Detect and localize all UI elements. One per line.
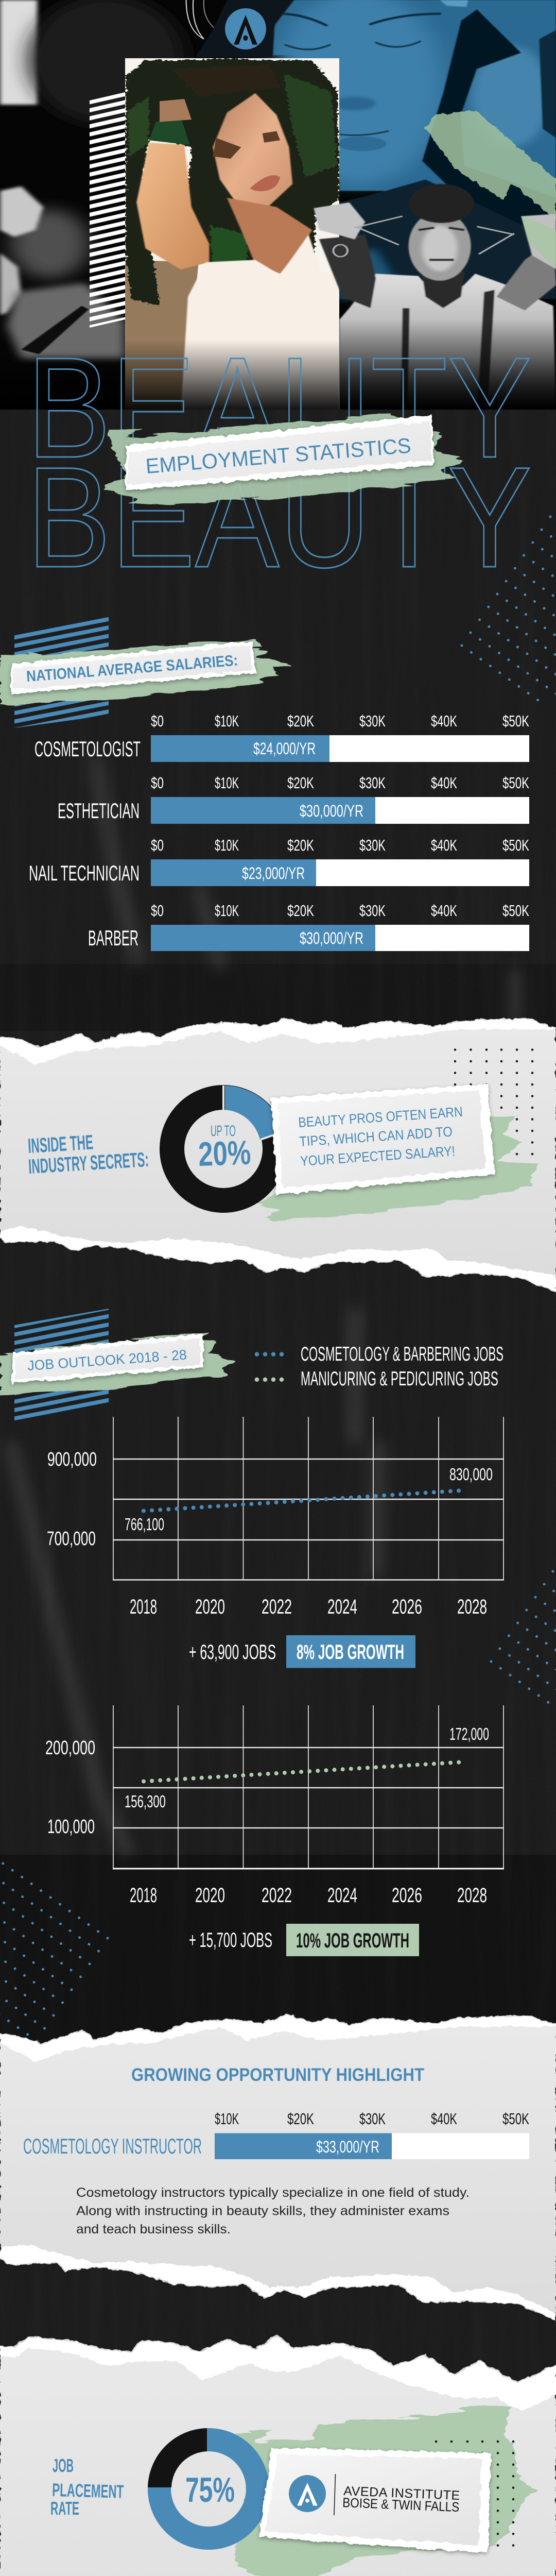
bar: nail technician: $23,000/YR [242,864,305,883]
line chart: cosmetology and barbering [47,1417,504,1618]
salary axis labels: $40K [431,774,457,792]
salary axis labels: $20K [287,712,314,730]
line chart: manicuring and pedicuring [45,1705,504,1907]
bar: esthetician: $30,000/YR [300,802,363,820]
salary axis labels: $50K [502,774,529,792]
title BEAUTY outline [27,327,532,597]
salary axis labels: $20K [287,836,314,854]
title banner: employment statistics [103,415,464,505]
logo card: AVEDA INSTITUTE [343,2484,460,2503]
bar: cosmetologist: $24,000/YR [253,739,316,758]
salary axis labels: $10K [215,774,239,792]
inside the industry secrets heading [27,1131,149,1178]
salary axis labels: $0 [151,774,164,792]
salary axis labels: $40K [431,902,457,920]
axis labels [215,2110,529,2128]
axis labels: $20K [287,2110,314,2128]
line chart: manicuring and pedicuring: 200,000 [45,1737,95,1759]
line chart: cosmetology and barbering: 2018 [130,1596,157,1618]
bar: barber: $30,000/YR [300,929,363,947]
heading banner: JOB OUTLOOK 2018 - 28 [27,1347,187,1374]
dot pattern: chart right [491,1571,556,1709]
bar: cosmetologist [34,735,529,762]
description text: Along with instructing in beauty skills, they administer exams [76,2204,449,2218]
salary axis labels: $50K [502,836,529,854]
line chart: manicuring and pedicuring: 2022 [262,1884,292,1907]
donut chart 75% [148,2428,257,2538]
bar: nail technician: NAIL TECHNICIAN [29,861,140,885]
torn paper panel [0,2014,556,2321]
salary axis labels: $40K [431,712,457,730]
salary axis labels: $10K [215,712,239,730]
dot grid [455,1050,532,1157]
section: national average salaries [0,617,529,951]
legend [257,1343,503,1390]
line chart: manicuring and pedicuring: 172,000 [449,1724,489,1743]
bar: cosmetology instructor: $33,000/YR [316,2138,379,2156]
salary axis labels: $0 [151,712,164,730]
torn paper panel [0,1017,556,1292]
description text: and teach business skills. [76,2222,231,2236]
salary axis labels: $20K [287,774,314,792]
salary axis labels: $0 [151,836,164,854]
blue face photo [195,0,556,299]
salary axis labels [151,712,529,920]
salary axis labels: $30K [359,712,386,730]
inside the industry secrets heading: INDUSTRY SECRETS: [28,1148,149,1178]
salary axis labels: $10K [215,902,239,920]
logo card [259,2448,491,2553]
hero photo collage [0,0,556,412]
bar: esthetician [58,797,529,824]
green paint stroke [255,1116,541,1219]
heading banner: NATIONAL AVERAGE SALARIES: [26,652,238,685]
salary axis labels: $0 [151,902,164,920]
green paint stroke [426,110,556,221]
line chart: cosmetology and barbering: 2022 [262,1596,292,1618]
bar: cosmetologist: COSMETOLOGIST [34,737,141,761]
section: job outlook [0,1309,504,1956]
bar: nail technician [29,859,529,886]
title banner: employment statistics: EMPLOYMENT STATISTICS [145,434,412,478]
job growth 10%: + 15,700 JOBS [189,1929,272,1952]
panel: job placement [0,2335,556,2576]
tips callout: BEAUTY PROS OFTEN EARN [298,1104,463,1130]
line chart: cosmetology and barbering: 2020 [195,1596,225,1618]
blue stripes [14,1309,109,1420]
salary axis labels: $50K [502,902,529,920]
job placement rate heading [50,2455,124,2519]
heading banner [0,640,291,704]
description text: Cosmetology instructors typically specialize in one field of study. [76,2185,470,2200]
bar: barber: BARBER [88,926,138,950]
torn paper panel [0,2335,556,2576]
woman photo [125,58,339,412]
top logo [225,8,266,49]
dot grid [436,2442,513,2548]
bar: cosmetology instructor: COSMETOLOGY INSTRUCTOR [23,2134,202,2158]
tips callout: YOUR EXPECTED SALARY! [300,1143,456,1169]
logo card: BOISE & TWIN FALLS [342,2495,460,2515]
bar: cosmetology instructor [23,2133,529,2159]
job growth 8%: + 63,900 JOBS [189,1641,276,1664]
line chart: manicuring and pedicuring: 2028 [457,1884,487,1907]
axis labels: $50K [502,2110,529,2128]
line chart: cosmetology and barbering: 2026 [392,1596,422,1618]
salary axis labels: $20K [287,902,314,920]
line chart: cosmetology and barbering: 700,000 [47,1528,96,1550]
donut chart 75%: 75% [185,2470,235,2510]
job growth 8% [189,1635,415,1668]
axis labels: $40K [431,2110,457,2128]
donut chart 20% [172,1086,284,1200]
line chart: manicuring and pedicuring: 2026 [392,1884,422,1907]
salary axis labels: $30K [359,836,386,854]
job growth 10% [189,1924,419,1956]
donut chart 20%: 20% [198,1133,251,1173]
salary axis labels: $30K [359,902,386,920]
left spray photo [0,0,216,359]
line chart: cosmetology and barbering: 830,000 [449,1465,493,1484]
line chart: manicuring and pedicuring: 100,000 [47,1816,95,1838]
heading: GROWING OPPORTUNITY HIGHLIGHT [131,2065,424,2085]
inside the industry secrets heading: INSIDE THE [27,1131,94,1158]
salary axis labels: $40K [431,836,457,854]
job placement rate heading: JOB [53,2455,74,2476]
salary axis labels: $10K [215,836,239,854]
dot pattern: chart left [0,1860,108,2041]
job placement rate heading: PLACEMENT [52,2479,124,2502]
axis labels: $10K [215,2110,239,2128]
job placement rate heading: RATE [50,2498,79,2519]
panel: growing opportunity highlight [0,2014,556,2321]
comb stripes [90,92,125,328]
dot pattern: hero right [462,517,556,707]
blue stripes [14,617,109,728]
job growth 10%: 10% JOB GROWTH [296,1929,409,1952]
salary axis labels: $30K [359,774,386,792]
job growth 8%: 8% JOB GROWTH [297,1641,404,1664]
tips callout [271,1084,495,1195]
salary axis labels: $50K [502,712,529,730]
line chart: cosmetology and barbering: 2028 [457,1596,487,1618]
line chart: manicuring and pedicuring: 2020 [195,1884,225,1907]
heading banner [0,1333,236,1395]
bar: barber [88,925,529,951]
line chart: cosmetology and barbering: 900,000 [47,1449,97,1470]
line chart: manicuring and pedicuring: 2018 [130,1884,157,1907]
green paint stroke [234,2407,535,2576]
line chart: manicuring and pedicuring: 156,300 [125,1792,166,1811]
panel: inside the industry [0,1017,556,1292]
donut chart 20%: UP TO [211,1123,236,1140]
line chart: cosmetology and barbering: 766,100 [125,1515,164,1534]
axis labels: $30K [359,2110,386,2128]
line chart: manicuring and pedicuring: 2024 [327,1884,357,1907]
description text [76,2185,470,2236]
line chart: cosmetology and barbering: 2024 [327,1596,357,1618]
barber photo [314,184,556,412]
bar: esthetician: ESTHETICIAN [58,799,140,823]
tips callout: TIPS, WHICH CAN ADD TO [299,1124,453,1149]
